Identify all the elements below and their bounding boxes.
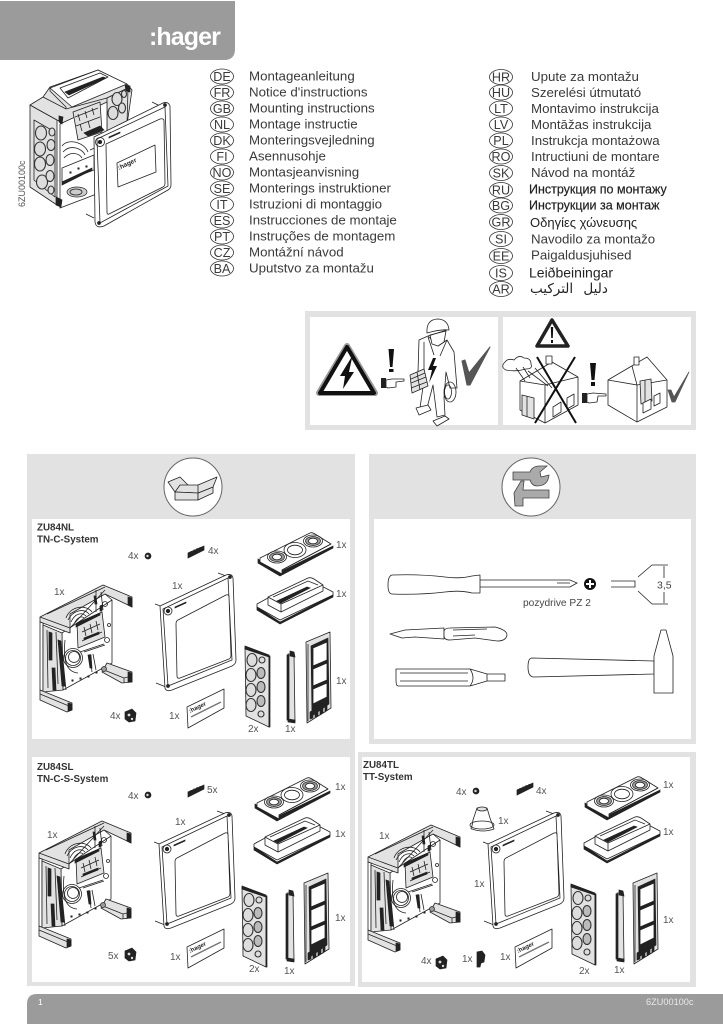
quantities: 1x <box>498 816 509 827</box>
cable grommet <box>470 807 494 831</box>
quantities: 1x <box>284 966 295 977</box>
icon: pozidrive tip <box>584 578 596 590</box>
quantities <box>54 540 347 735</box>
language list left: CZ <box>214 246 231 260</box>
quantities <box>47 782 346 977</box>
language list left: Montasjeanvisning <box>249 164 359 180</box>
language list right: Upute za montažu <box>531 69 639 84</box>
language list left: Montážní návod <box>249 244 344 260</box>
heading: ZU84SL: ZU84SL <box>37 762 73 773</box>
quantities <box>379 780 674 977</box>
enclosure base <box>368 825 460 952</box>
cover <box>155 573 236 691</box>
panel: tools <box>369 454 696 744</box>
storm cloud <box>503 356 531 371</box>
quantities: 1x <box>335 829 346 840</box>
gland plate <box>571 884 596 965</box>
knife <box>390 627 507 641</box>
language list left: FI <box>216 150 228 164</box>
language list left: Mounting instructions <box>249 100 375 116</box>
quantities: 1x <box>663 827 674 838</box>
cover <box>154 811 235 929</box>
language list left: Montageanleitung <box>249 68 355 84</box>
quantities: 1x <box>335 913 346 924</box>
language list right: IS <box>495 266 507 280</box>
language list right: Οδηγίες χώνευσης <box>530 215 637 230</box>
language list right: SI <box>495 232 507 246</box>
icon: exclamation mark <box>590 363 596 386</box>
quantities: 1x <box>54 587 65 598</box>
terminal block <box>436 956 447 969</box>
product illustration: open enclosure with cover <box>30 70 171 227</box>
quantities: 1x <box>379 831 390 842</box>
vent plate <box>255 778 330 821</box>
icon: wrench and hammer <box>502 458 560 516</box>
enclosure base <box>40 585 132 712</box>
rail plate <box>254 818 330 864</box>
icon: check mark <box>668 372 689 402</box>
quantities: 5x <box>108 951 119 962</box>
page number: 1 <box>38 997 43 1007</box>
language list right: EE <box>493 250 509 264</box>
language list left: GB <box>213 102 231 116</box>
language list left <box>210 68 397 276</box>
language list right: Paigaldusjuhised <box>531 248 632 262</box>
blade tip dimension <box>611 565 672 604</box>
quantities: 1x <box>172 581 183 592</box>
screwdriver <box>388 575 577 594</box>
quantities: 1x <box>335 782 346 793</box>
quantities: 4x <box>421 956 432 967</box>
language list right: LV <box>494 118 509 132</box>
language list right: PL <box>493 134 509 148</box>
icon: general warning triangle <box>537 320 568 346</box>
house with wrong installation <box>516 356 578 423</box>
chisel <box>396 669 505 686</box>
quantities: 1x <box>336 540 347 551</box>
screw <box>145 792 151 798</box>
language list right: LT <box>494 102 508 116</box>
language list left: ES <box>214 214 230 228</box>
quantities: 1x <box>663 915 674 926</box>
rail plate <box>257 578 333 624</box>
frame <box>306 632 331 723</box>
quantities: 1x <box>500 952 511 963</box>
icon: electrical hazard triangle <box>319 346 375 393</box>
hager logo: :hager <box>149 23 221 51</box>
language list left: Monterings instruktioner <box>249 180 391 196</box>
language list left: Asennusohje <box>249 148 326 164</box>
language list right: GR <box>492 216 510 230</box>
panel: safety warnings <box>305 311 696 430</box>
sticker label <box>515 929 552 968</box>
language list right: Intructiuni de montare <box>531 149 660 164</box>
language list right: Инструкции за монтаж <box>529 198 660 212</box>
blade tip dimension: 3,5 <box>657 580 672 592</box>
language list left: DK <box>213 134 231 148</box>
quantities: 4x <box>208 546 219 557</box>
quantities: 1x <box>663 780 674 791</box>
quantities: 4x <box>128 551 139 562</box>
language list right: Leiðbeiningar <box>529 264 613 280</box>
heading: TT-System: TT-System <box>363 772 413 783</box>
terminal block <box>125 948 136 961</box>
screw <box>473 788 479 794</box>
vent plate <box>258 533 333 576</box>
panel: scope of delivery ZU84NL <box>27 454 355 986</box>
quantities: 2x <box>579 966 590 977</box>
language list right: AR <box>492 282 510 296</box>
language list right: Návod na montáž <box>531 165 635 180</box>
icon: open box <box>164 458 222 516</box>
language list right: Инструкция по монтажу <box>529 182 667 196</box>
language list left: Uputstvo za montažu <box>249 260 374 276</box>
language list left: FR <box>214 86 230 100</box>
sticker label: :hager <box>188 941 208 955</box>
panel: ZU84SL <box>32 757 350 982</box>
language list right: RO <box>492 150 511 164</box>
quantities: 1x <box>614 965 625 976</box>
quantities: 1x <box>175 817 186 828</box>
quantities: 1x <box>336 589 347 600</box>
language list left: DE <box>213 70 231 84</box>
worker with hard hat <box>410 319 457 426</box>
language list right: Instrukcja montażowa <box>531 133 660 148</box>
quantities: 4x <box>128 791 139 802</box>
vent plate <box>585 777 660 820</box>
footer band <box>27 994 723 1024</box>
icon: pointing hand <box>381 378 404 388</box>
language list left: NO <box>213 166 232 180</box>
sticker label <box>187 929 224 968</box>
icon: check mark <box>462 347 490 385</box>
icon: pointing hand <box>582 393 606 403</box>
quantities: 5x <box>207 785 218 796</box>
heading: TN-C-System: TN-C-System <box>37 534 99 546</box>
label: pozydrive: pozydrive PZ 2 <box>523 598 591 609</box>
rail plate <box>584 817 660 863</box>
language list left: Notice d'instructions <box>249 84 368 100</box>
heading: ZU84TL: ZU84TL <box>363 760 399 771</box>
language list left: Monteringsvejledning <box>249 132 375 148</box>
language list left: Montage instructie <box>249 116 358 132</box>
language list right: Navodilo za montažo <box>531 232 655 246</box>
quantities: 1x <box>474 879 485 890</box>
language list right: HU <box>492 86 510 100</box>
quantities: 1x <box>462 954 473 965</box>
language list right: BG <box>492 199 510 213</box>
icon: exclamation mark <box>388 349 394 372</box>
quantities: 4x <box>536 786 547 797</box>
icon: prohibited cross <box>535 357 576 423</box>
sticker label <box>187 689 224 728</box>
mini cover label: :hager <box>117 157 138 172</box>
gland plate <box>245 646 270 727</box>
quantities: 4x <box>456 787 467 798</box>
language list right <box>490 69 667 297</box>
language list right: HR <box>492 70 510 84</box>
sticker label: :hager <box>188 701 208 715</box>
gland plate <box>242 886 267 967</box>
header band <box>0 1 235 60</box>
language list left: Instrucciones de montaje <box>249 212 397 228</box>
quantities: 2x <box>249 964 260 975</box>
language list left: SE <box>214 182 230 196</box>
language list left: Istruzioni di montaggio <box>249 196 382 212</box>
heading: TN-C-S-System: TN-C-S-System <box>37 774 109 785</box>
language list right: Montavimo instrukcija <box>531 101 659 116</box>
frame <box>304 873 329 964</box>
panel: ZU84TL <box>358 752 696 987</box>
language list left: PT <box>214 230 230 244</box>
heading: ZU84NL: ZU84NL <box>37 522 74 534</box>
document reference: 6ZU00100c <box>17 160 27 207</box>
clip <box>188 785 204 797</box>
quantities: 1x <box>336 676 347 687</box>
language list right: دليل التركيب <box>530 281 608 297</box>
earth terminal <box>477 951 485 967</box>
language list right: RU <box>492 184 510 198</box>
hammer <box>528 630 673 693</box>
quantities: 2x <box>248 724 259 735</box>
document code: 6ZU00100c <box>646 997 694 1007</box>
language list right: Szerelési útmutató <box>531 85 641 100</box>
language list left: Instruções de montagem <box>249 228 395 244</box>
sealing strip <box>287 651 295 723</box>
screw <box>145 553 151 559</box>
enclosure base <box>39 821 131 948</box>
house with correct installation <box>608 357 667 422</box>
clip <box>188 546 204 558</box>
cover <box>483 811 564 929</box>
quantities: 1x <box>285 724 296 735</box>
terminal block <box>125 709 136 722</box>
quantities: 4x <box>110 711 121 722</box>
sealing strip <box>616 890 624 962</box>
quantities: 1x <box>170 952 181 963</box>
language list left: IT <box>216 198 228 212</box>
clip <box>517 783 533 795</box>
quantities: 1x <box>47 830 58 841</box>
language list right: Montāžas instrukcija <box>531 117 652 132</box>
frame <box>633 873 658 964</box>
sticker label: :hager <box>516 941 536 955</box>
language list right: SK <box>493 166 510 180</box>
language list left: NL <box>214 118 230 132</box>
sealing strip <box>286 890 294 962</box>
quantities: 1x <box>169 711 180 722</box>
language list left: BA <box>214 262 231 276</box>
